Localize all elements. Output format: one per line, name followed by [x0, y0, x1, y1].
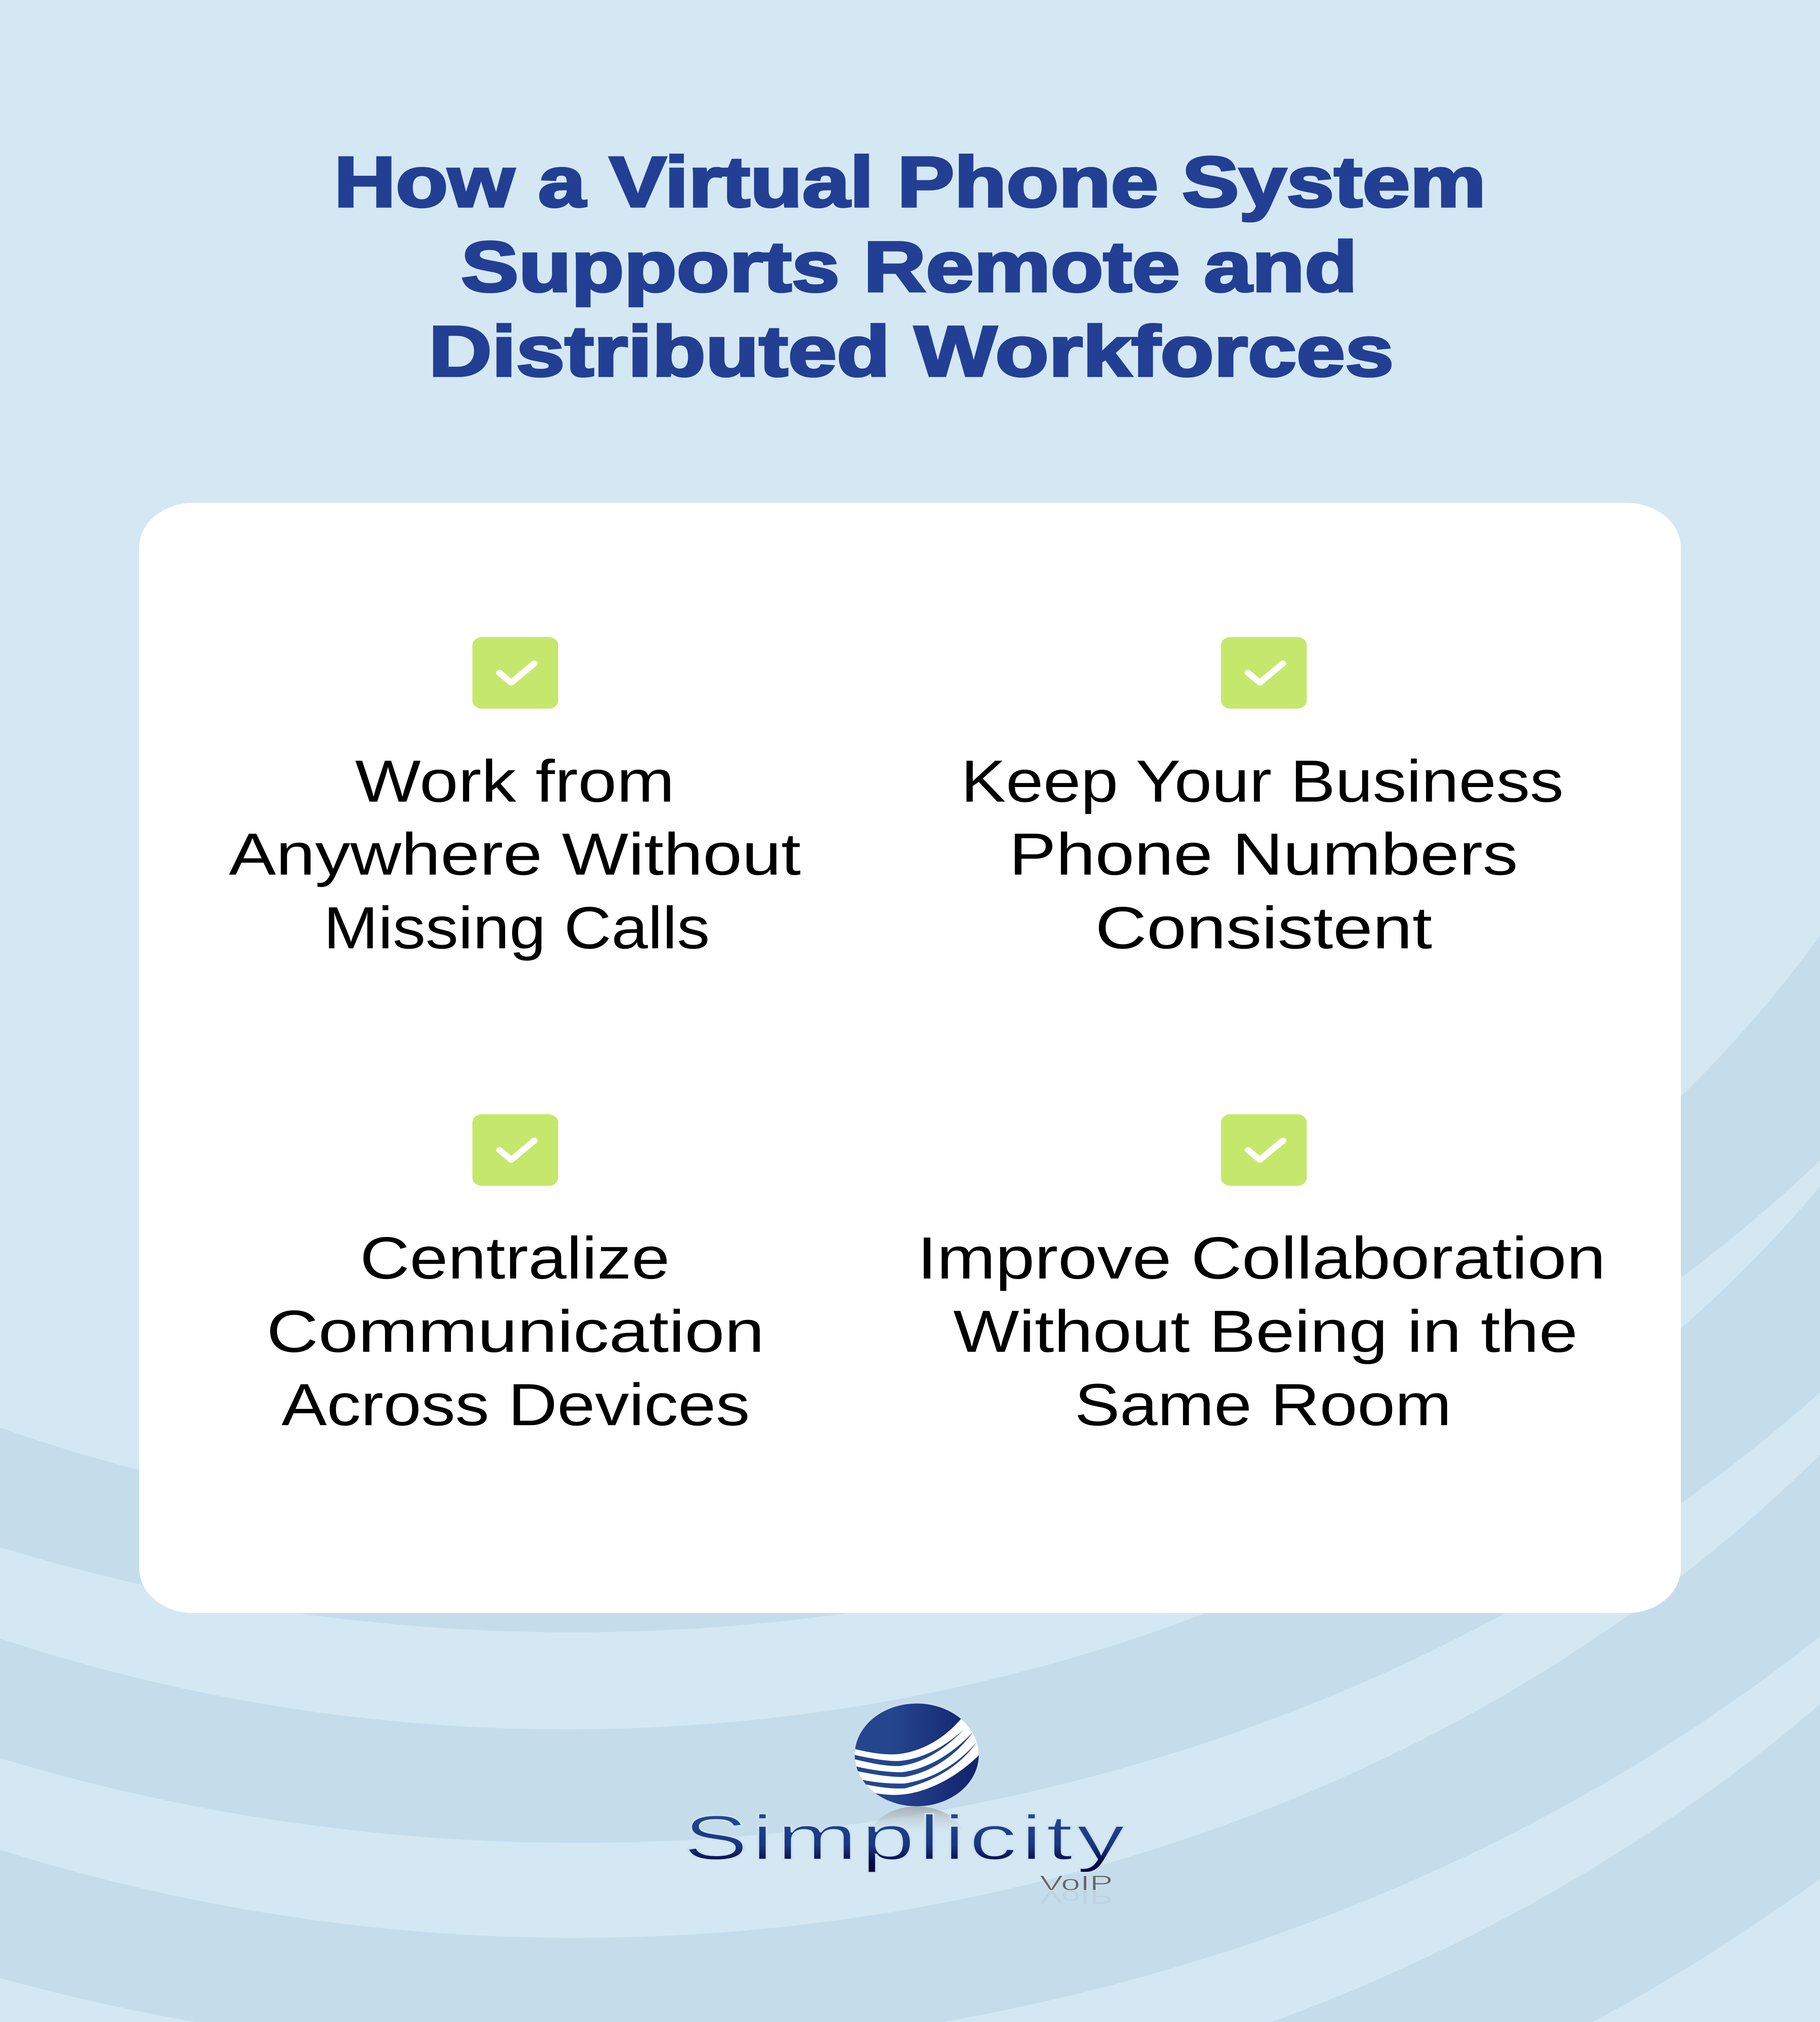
text: keep your business phone numbers consistent: Phone Numbers [1009, 821, 1518, 888]
title: Distributed Workforces [429, 312, 1394, 391]
text: improve collaboration without being in the same room: Without Being in the [953, 1298, 1578, 1365]
wordmark: Simplicity: Simplicity [684, 1802, 1128, 1873]
text: centralize communication across devices: Across Devices [281, 1372, 750, 1438]
text: keep your business phone numbers consistent [961, 748, 1564, 961]
title: Supports Remote and [461, 227, 1357, 307]
text: centralize communication across devices: Centralize [360, 1225, 670, 1291]
icon: green check [1221, 637, 1307, 709]
title: How a Virtual Phone System [334, 142, 1486, 222]
logo: Simplicity VoIP [684, 1703, 1128, 1908]
text: work from anywhere without missing calls: Anywhere Without [229, 821, 801, 888]
text: work from anywhere without missing calls [229, 748, 801, 961]
text: work from anywhere without missing calls: Work from [355, 748, 675, 814]
icon: green check [1221, 1114, 1307, 1186]
title [334, 142, 1486, 391]
item: improve collaboration [917, 1114, 1606, 1438]
text: keep your business phone numbers consistent: Consistent [1095, 895, 1432, 961]
item: keep business numbers [961, 637, 1564, 961]
text: centralize communication across devices [267, 1225, 764, 1438]
text: improve collaboration without being in the same room: Same Room [1075, 1372, 1452, 1438]
icon: green check [472, 637, 558, 709]
panel: benefits card [139, 503, 1681, 1613]
wordmark: VoIP: VoIP [1040, 1871, 1113, 1895]
item: centralize communication [267, 1114, 764, 1438]
text: improve collaboration without being in the same room [917, 1225, 1606, 1438]
icon: green check [472, 1114, 558, 1186]
text: centralize communication across devices: Communication [267, 1298, 764, 1365]
icon: striped globe [851, 1703, 982, 1806]
text: keep your business phone numbers consistent: Keep Your Business [961, 748, 1564, 814]
logo reflection [869, 1806, 965, 1834]
text: work from anywhere without missing calls: Missing Calls [324, 895, 710, 961]
wordmark reflection: VoIP [1040, 1887, 1113, 1908]
text: improve collaboration without being in the same room: Improve Collaboration [917, 1225, 1606, 1291]
item: work from anywhere [229, 637, 801, 961]
